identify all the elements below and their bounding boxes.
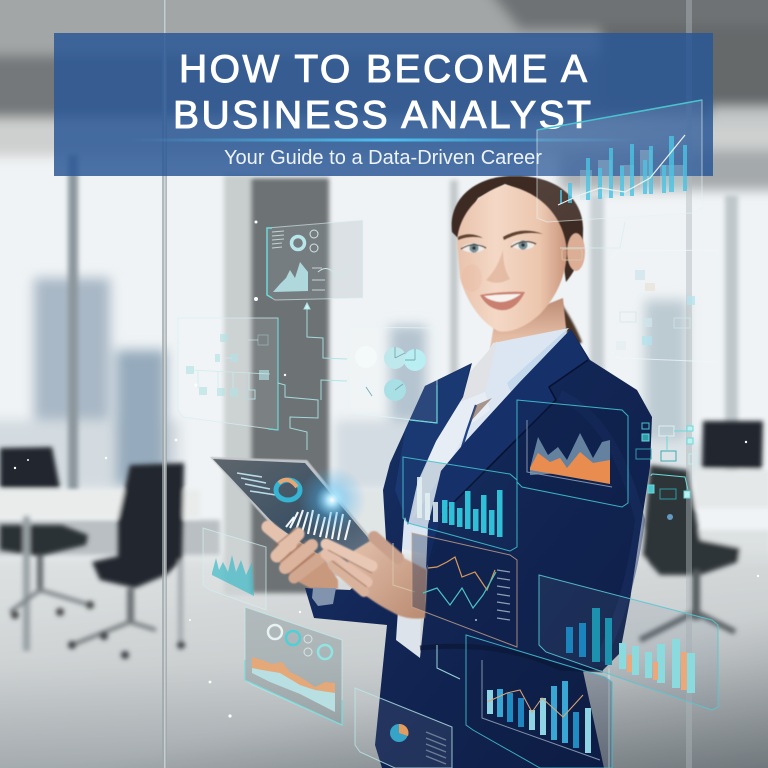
title banner xyxy=(54,33,713,176)
title: BUSINESS ANALYST xyxy=(173,94,591,137)
right hand with fingers xyxy=(326,536,427,619)
face xyxy=(457,185,567,332)
panel: faint flow chart upper right xyxy=(560,222,717,362)
facial features xyxy=(458,231,543,310)
blazer xyxy=(305,329,652,768)
tablet light glow xyxy=(298,466,366,534)
neck xyxy=(486,298,566,395)
panel: small line chart xyxy=(203,528,266,610)
panel: pie charts xyxy=(349,327,437,423)
sparkle dots xyxy=(14,220,759,718)
ponytail xyxy=(558,302,582,348)
title: HOW TO BECOME A xyxy=(179,48,587,91)
panel: blazer line chart xyxy=(412,533,517,647)
connector arrows xyxy=(278,303,460,679)
panel: donuts and area chart xyxy=(245,607,342,725)
woman business analyst xyxy=(210,176,652,768)
subtitle: Your Guide to a Data-Driven Career xyxy=(224,146,542,169)
shirt xyxy=(396,328,569,658)
title xyxy=(173,48,591,137)
flow chart right of shoulder xyxy=(636,423,696,499)
panel: right bar chart xyxy=(539,575,718,710)
left hand with fingers xyxy=(268,527,338,589)
hair xyxy=(452,176,583,282)
left cuff xyxy=(312,588,336,606)
panel: dashboard with donut xyxy=(267,220,363,300)
panel: blazer bar chart xyxy=(403,457,517,551)
ear xyxy=(567,233,585,271)
panel: top right bar chart xyxy=(537,100,702,222)
panel: orange area chart xyxy=(517,400,628,507)
panel: bottom bar chart xyxy=(466,635,612,768)
tablet xyxy=(210,457,387,578)
panel: process flow diagram xyxy=(178,318,278,430)
glass frame lines xyxy=(162,0,692,768)
panel: bottom pie xyxy=(355,688,452,768)
